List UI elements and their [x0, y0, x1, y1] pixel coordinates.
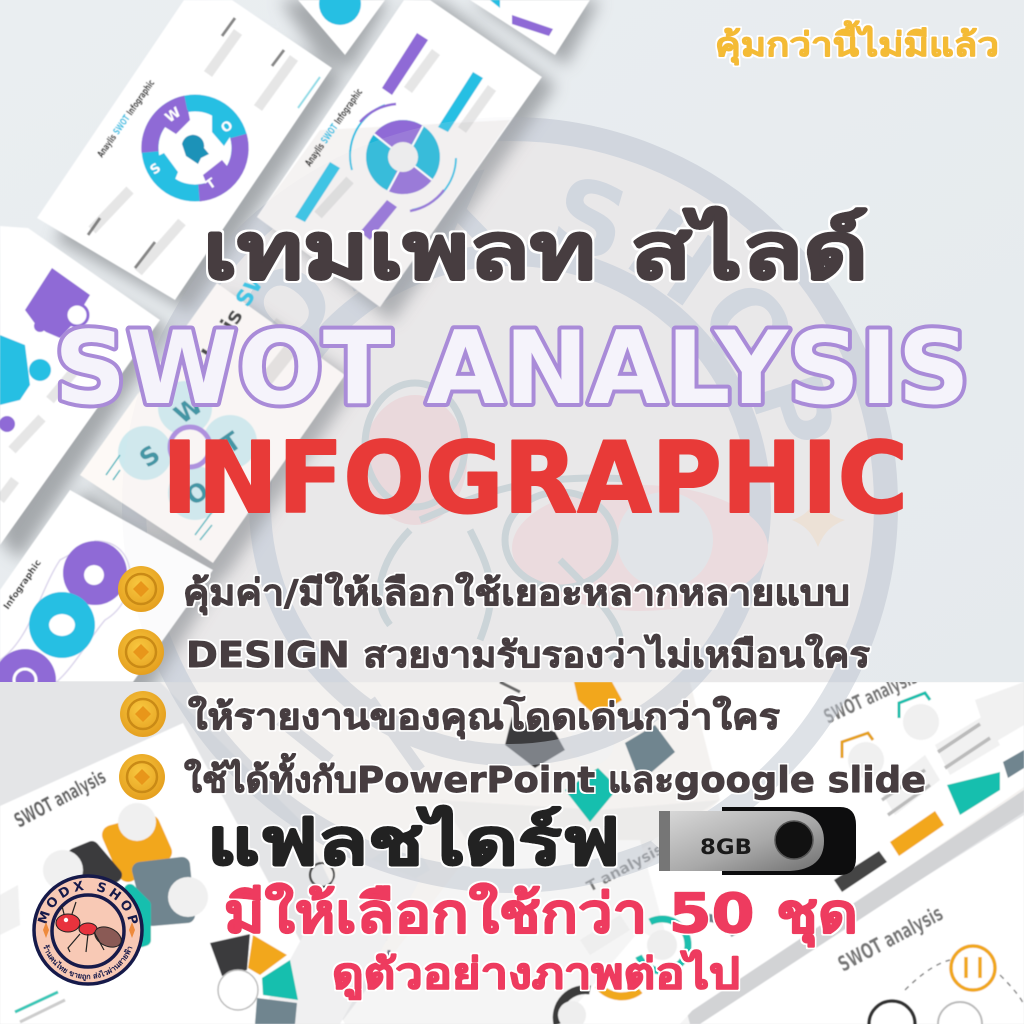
- bullet 3: ให้รายงานของคุณโดดเด่นกว่าใคร: [188, 695, 781, 740]
- slide: small top with cyan circle: [298, 0, 590, 55]
- bullet 1: [118, 566, 850, 616]
- slide: top-right hexagons: SWOT analysis: [820, 665, 921, 729]
- slide: SWOT petals: S: [134, 439, 165, 473]
- bullet 3: [120, 691, 781, 740]
- slide shadows: [0, 0, 600, 700]
- slide: centre cyan ring: [310, 835, 735, 1024]
- icon: MODX SHOP badge: MODX SHOP: [38, 880, 138, 924]
- slide: SWOT wheel: [257, 0, 542, 307]
- slide: puzzle: [0, 226, 160, 545]
- slide: SWOT wheel: Anaylis SWOT Infographic: [303, 87, 365, 169]
- bullet 4: ใช้ได้ทั้งกับPowerPoint และgoogle slide: [184, 753, 926, 801]
- slide: bottom-left with wheel: SWOT analysis: [10, 764, 110, 832]
- callout: see next image: ดูตัวอย่างภาพต่อไป: [332, 949, 740, 1000]
- slide: SWOT donut: T: [203, 176, 219, 193]
- thin haze over the left slides: [140, 118, 522, 652]
- slide: bottom-left circles: [0, 490, 214, 682]
- bullet 1: คุ้มค่า/มีให้เลือกใช้เยอะหลากหลายแบบ: [183, 571, 850, 616]
- title: Thai heading: เทมเพลท สไลด์: [203, 206, 868, 297]
- slide: top centre squares: [500, 682, 675, 822]
- slide: top-right hexagons: [648, 682, 1024, 1008]
- slide: SWOT petals: T: [216, 426, 247, 460]
- slide: SWOT donut: Anaylis SWOT Infographic: [95, 78, 157, 160]
- bullet 2: DESIGN สวยงามรับรองว่าไม่เหมือนใคร: [186, 633, 871, 676]
- faint watermark over the lower slides: [164, 682, 856, 893]
- title: SWOT ANALYSIS: SWOT ANALYSIS: [54, 309, 970, 427]
- heading: flash drive: แฟลชไดร์ฟ: [207, 805, 620, 880]
- icon: USB flash drive 8GB: [651, 807, 856, 875]
- slide: SWOT petals: [80, 276, 344, 564]
- callout: more than 50 sets: มีให้เลือกใช้กว่า 50 ชุด: [224, 882, 858, 948]
- slide: bottom-right SWOT analysis: SWOT analysis: [834, 901, 947, 976]
- slide: SWOT petals: lysis SWOT: [198, 236, 292, 365]
- slide: bottom-right SWOT analysis: [672, 790, 1024, 1024]
- icon: faded shop watermark: MODX SHOP: [248, 178, 832, 440]
- title: INFOGRAPHIC: INFOGRAPHIC: [162, 422, 908, 536]
- slide: SWOT donut: O: [218, 118, 236, 137]
- slide: SWOT petals: W: [169, 390, 208, 430]
- list: feature bullets: [118, 566, 926, 801]
- panel: upper background with tilted slides: [0, 0, 1024, 682]
- slide: SWOT donut: [37, 0, 332, 300]
- slide: centre band: [161, 682, 1024, 953]
- slide: bottom-left circles: Infographic: [2, 558, 44, 612]
- ant: [56, 902, 124, 952]
- panel: lower background with SWOT analysis slides: [0, 682, 1024, 1024]
- text: promo tagline: คุ้มกว่านี้ไม่มีแล้ว: [715, 20, 999, 66]
- slide: bottom-left with wheel: [0, 723, 420, 1024]
- icon: MODX SHOP badge: [32, 874, 144, 986]
- slide: SWOT petals: O: [180, 475, 214, 511]
- slide: SWOT donut: W: [162, 104, 184, 126]
- icon: faded shop watermark: [122, 118, 898, 682]
- icon: MODX SHOP badge: ร้านคนไทย ขายถูก ส่งไวผ่านสายฟ้า: [44, 944, 132, 982]
- icon: USB flash drive 8GB: 8GB: [700, 835, 752, 859]
- slide: SWOT donut: S: [148, 161, 164, 178]
- slide: centre cyan ring: T analysis: [583, 840, 666, 896]
